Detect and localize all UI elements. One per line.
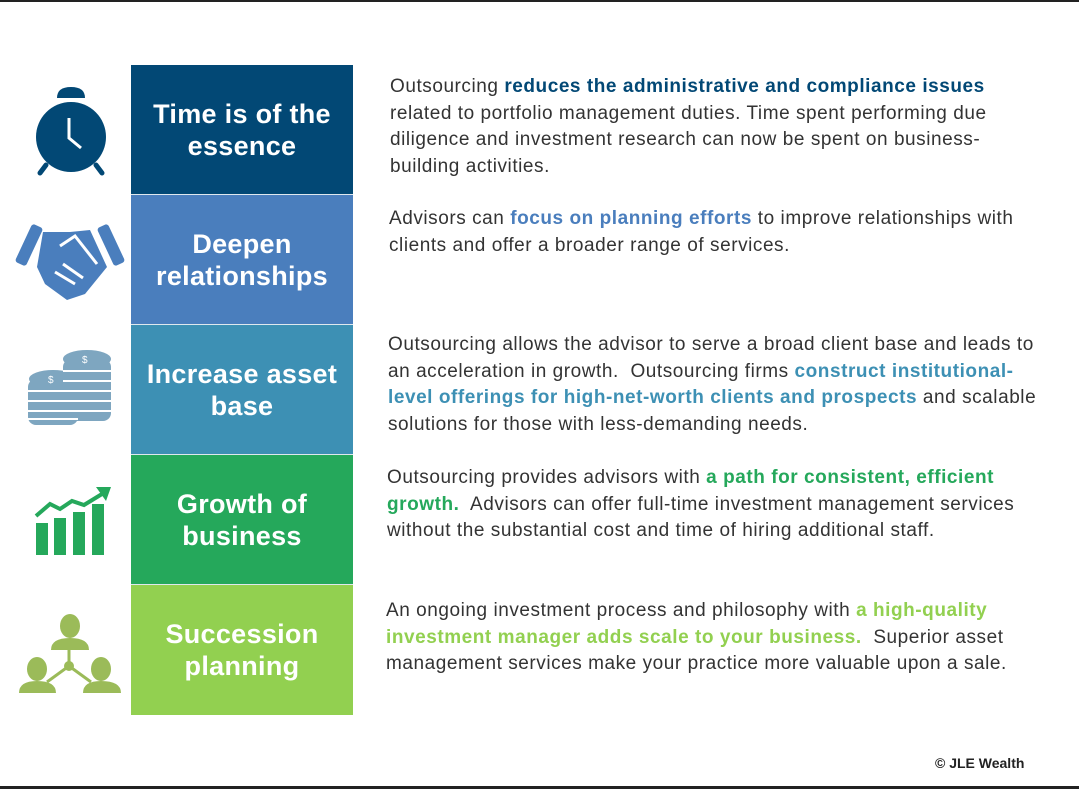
text: succession — [386, 600, 1007, 674]
text: relationships: Advisors can focus on planning efforts to improve relationships with — [389, 208, 1013, 229]
icon: handshake — [16, 224, 124, 300]
text: relationships — [389, 208, 1013, 256]
band: time: essence — [188, 130, 296, 160]
text: time: Outsourcing reduces the administrative and compliance issues — [390, 76, 985, 97]
text: succession: An ongoing investment process and philosophy with a high-quality — [386, 600, 987, 621]
text: growth — [387, 467, 1014, 541]
band: increase asset base: base — [211, 390, 273, 420]
text: asset base: an acceleration in growth. Outsourcing firms construct institutional- — [388, 360, 1014, 382]
icon: coins: $ — [48, 375, 54, 386]
text: succession: management services make your practice more valuable upon a sale. — [386, 653, 1007, 674]
band: succession — [131, 585, 353, 715]
band: growth: Growth of — [177, 488, 307, 518]
band: time: Time is of the — [153, 98, 331, 128]
text: relationships: clients and offer a broader range of services. — [389, 234, 790, 256]
band: deepen relationships: relationships — [156, 260, 328, 290]
band: succession: Succession — [165, 619, 319, 649]
icon: coins — [28, 350, 111, 425]
icon: alarm clock — [36, 87, 106, 176]
band: increase asset base: Increase asset — [147, 358, 337, 388]
icon: growth chart — [34, 487, 111, 555]
band: time — [131, 65, 353, 195]
band: succession: planning — [185, 651, 299, 681]
text: asset base: level offerings for high-net-worth clients and prospects and scalable — [388, 387, 1036, 408]
icon: succession people — [19, 614, 121, 693]
text: growth: growth. Advisors can offer full-time investment management services — [387, 494, 1014, 514]
text: time: diligence and investment research can now be spent on business- — [390, 129, 980, 150]
band: increase asset base — [131, 325, 353, 455]
text: time: building activities. — [390, 156, 550, 176]
band: growth — [131, 455, 353, 585]
text: succession: investment manager adds scale to your business. Superior asset — [386, 626, 1004, 648]
band: deepen relationships — [131, 195, 353, 325]
text: time — [390, 76, 987, 176]
band: growth: business — [182, 520, 302, 550]
text: asset base: Outsourcing allows the advisor to serve a broad client base and leads to — [388, 334, 1034, 355]
text: time: related to portfolio management duties. Time spent performing due — [390, 102, 987, 124]
text: asset base — [388, 334, 1036, 434]
icon: coins: $ — [82, 355, 88, 366]
text: growth: Outsourcing provides advisors with a path for consistent, efficient — [387, 467, 994, 488]
copyright: © JLE Wealth — [935, 755, 1024, 771]
band: deepen relationships: Deepen — [192, 228, 292, 258]
text: asset base: solutions for those with less-demanding needs. — [388, 414, 808, 434]
text: growth: without the substantial cost and time of hiring additional staff. — [387, 520, 935, 541]
